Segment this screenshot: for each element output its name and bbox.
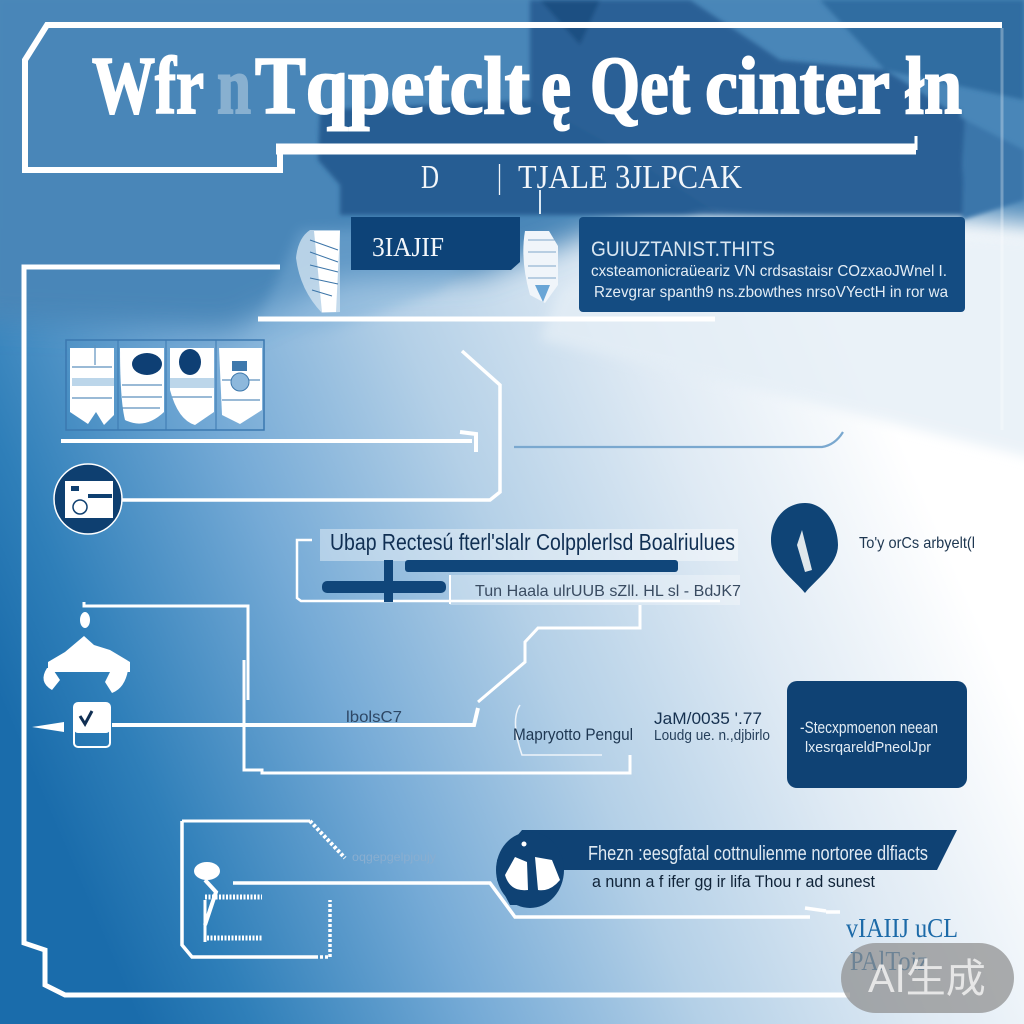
panel: dark callout: -Stecxpmoenon neean bbox=[800, 718, 938, 737]
icon: check card bbox=[32, 703, 110, 747]
left section frame bbox=[24, 267, 850, 995]
date text block: Loudg ue. n.,djbirlo bbox=[654, 727, 770, 744]
connector: lower left box bbox=[84, 602, 630, 773]
subtitle bbox=[421, 159, 742, 196]
panel: dark callout: lxesrqareldPneolJpr bbox=[805, 739, 931, 756]
connector: middle down bbox=[478, 605, 640, 702]
date text block bbox=[654, 709, 770, 744]
subtitle: D bbox=[421, 159, 439, 196]
subtitle: TJALE 3JLPCAK bbox=[518, 159, 742, 196]
icon: circular device bbox=[54, 464, 122, 534]
title: Wfr bbox=[92, 40, 204, 131]
banner: dark ribbon bbox=[496, 830, 957, 908]
label panel: dark box: 3IAJIF bbox=[372, 232, 444, 262]
rounded outline label bbox=[513, 705, 633, 755]
rounded outline label: Mapryotto Pengul bbox=[513, 725, 633, 744]
divider under top panels bbox=[258, 316, 715, 322]
title frame bbox=[25, 25, 1002, 430]
small label: lbolsC7 bbox=[346, 709, 402, 726]
title: Tqpetclt bbox=[255, 40, 530, 131]
banner: dark ribbon: a nunn a f ifer gg ir lifa Thou r ad sunest bbox=[592, 872, 875, 891]
faint label: oqgepgelpjoujy bbox=[352, 850, 436, 864]
title: ę bbox=[541, 40, 571, 131]
connector: subtitle stem bbox=[539, 190, 541, 214]
icon: bell person bbox=[43, 612, 130, 693]
title: Qet bbox=[590, 40, 690, 131]
panel: dark info box: cxsteamonicraüeariz VN crdsastaisr COzxaoJWnel I. bbox=[591, 263, 947, 280]
subtitle: | bbox=[497, 159, 502, 196]
bottom right blue text: vIAIIJ uCL bbox=[846, 913, 958, 943]
title: łn bbox=[905, 40, 962, 131]
panel: dark info box: GUIUZTANIST.THITS bbox=[591, 238, 775, 261]
connector: elbow bbox=[122, 351, 500, 500]
icon: four column map bbox=[66, 340, 264, 430]
watermark badge: AI生成 bbox=[868, 957, 986, 1001]
bottom right blue text bbox=[846, 913, 958, 976]
bottom right blue text: PAlToiz bbox=[850, 946, 928, 976]
connector: map underline bbox=[61, 432, 476, 452]
panel: middle chart block: Tun Haala ulrUUB sZll. HL sl - BdJK7 bbox=[475, 583, 741, 600]
panel: dark callout bbox=[787, 681, 967, 788]
title: cinter bbox=[705, 40, 890, 131]
pin label: To'y orCs arbyelt(l bbox=[859, 535, 975, 552]
title bbox=[92, 40, 962, 131]
banner: dark ribbon: Fhezn :eesgfatal cottnulienme nortoree dlfiacts bbox=[588, 843, 928, 865]
panel: dark info box bbox=[579, 217, 965, 312]
watermark badge bbox=[841, 943, 1014, 1013]
label panel: dark box bbox=[351, 217, 520, 270]
icon group: lower-left frame bbox=[182, 821, 345, 957]
thin blue line right bbox=[514, 432, 843, 447]
connector: lower line bbox=[233, 883, 840, 917]
panel: middle chart block: Ubap Rectesú fterl'slalr Colpplerlsd Boalriulues bbox=[330, 529, 735, 555]
title: n bbox=[217, 40, 251, 131]
icon: location pin bbox=[771, 503, 838, 593]
icon: left ribbed tab bbox=[296, 230, 340, 313]
icon: right ribbed tab bbox=[523, 231, 558, 303]
connector: check line bbox=[112, 708, 478, 725]
panel: middle chart block bbox=[297, 529, 741, 605]
panel: dark info box: Rzevgrar spanth9 ns.zbowthes nrsoVYectH in ror wa bbox=[594, 284, 948, 301]
date text block: JaM/0035 '.77 bbox=[654, 709, 762, 728]
